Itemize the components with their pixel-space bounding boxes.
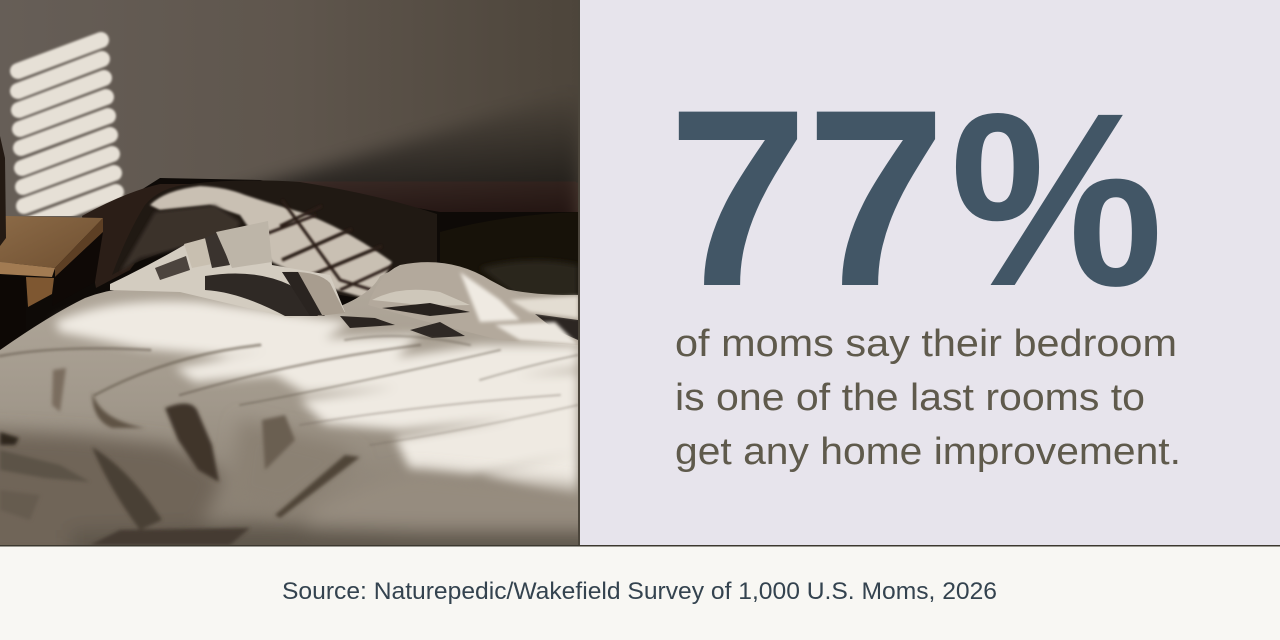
line 3: get any home improvement. (675, 431, 1181, 473)
source footer: Source: Naturepedic/Wakefield Survey of 1,000 U.S. Moms, 2026 (282, 578, 997, 605)
dark sheet folds (0, 368, 360, 545)
line 1: of moms say their bedroom (675, 323, 1177, 365)
sunlight on sheets (55, 301, 578, 500)
dark pillow right (440, 212, 578, 276)
bottle on table (0, 136, 6, 246)
striped pillow cover (110, 221, 345, 318)
main sheet (0, 265, 578, 545)
folded striped duvet (340, 262, 578, 345)
panel: bedroom photo (0, 0, 600, 560)
shadow behind bed (0, 178, 580, 350)
description text (675, 323, 1181, 473)
shaded lower sheet (0, 422, 578, 545)
window light stripes on wall (18, 40, 116, 226)
digits 77: 77 (668, 58, 946, 339)
creases in sheets (0, 336, 578, 445)
line 2: is one of the last rooms to (675, 377, 1145, 419)
photo edge line (578, 0, 580, 546)
bottom rule (0, 545, 1280, 546)
percent sign: % (950, 61, 1163, 338)
bedside table (0, 216, 103, 307)
panel: statistic background (580, 0, 1280, 545)
statistic: 77% (668, 58, 1163, 339)
left pillow (112, 180, 437, 300)
headboard (82, 184, 190, 288)
wall (0, 0, 578, 264)
